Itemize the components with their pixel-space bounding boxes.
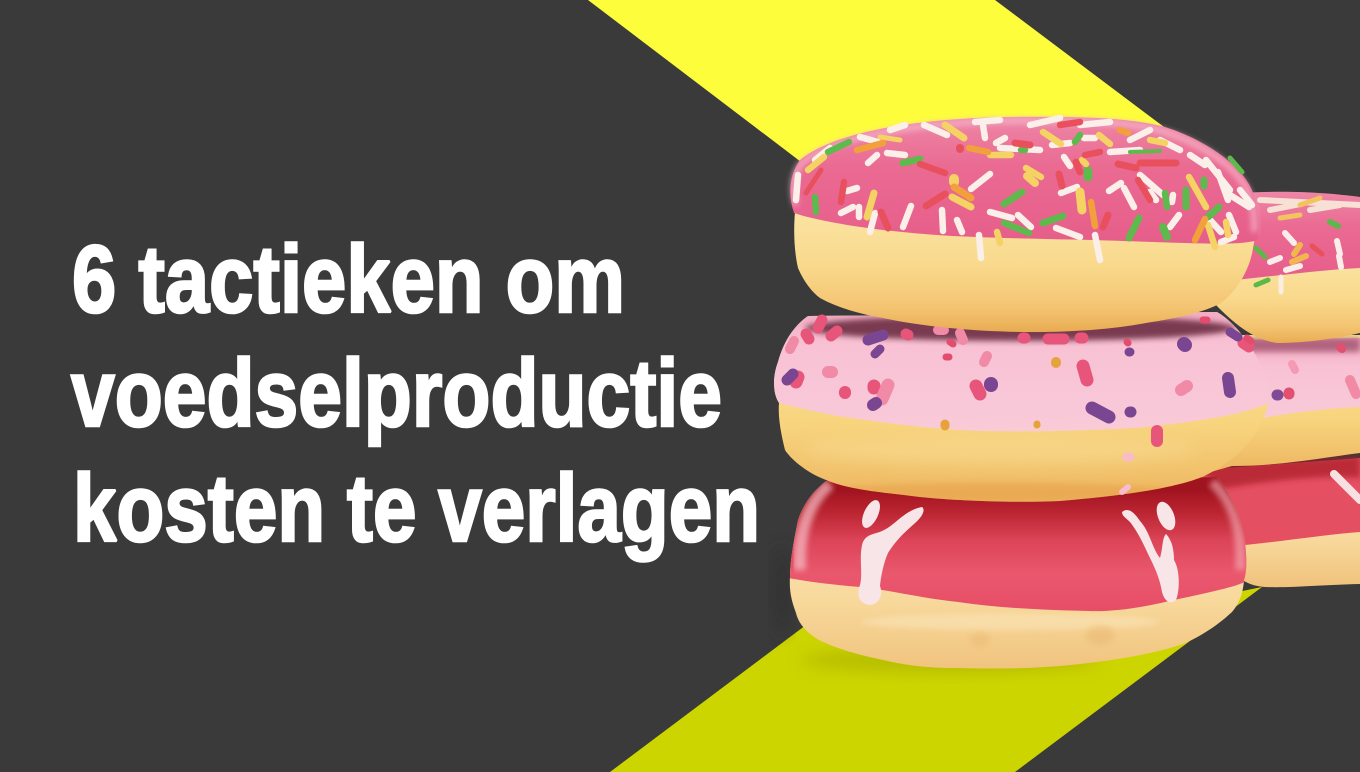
back top donut (1200, 192, 1360, 343)
donut shadow on background (772, 545, 792, 635)
front middle donut: light pink icing with crumbs (770, 300, 1275, 505)
white drizzle right (1122, 499, 1179, 602)
dough (794, 212, 1255, 332)
title (71, 226, 760, 562)
yellow chevron: upper band (588, 0, 1172, 200)
crumbs (787, 320, 1251, 492)
back donut stack (1200, 192, 1360, 587)
title: 6 tactieken om (72, 226, 625, 333)
white drizzle left (858, 497, 924, 605)
back middle donut (1200, 335, 1360, 475)
sprinkles (796, 118, 1252, 260)
title: voedselproductie (71, 340, 722, 447)
yellow chevron: lower band (610, 587, 1262, 772)
front bottom donut: red icing with white drizzle (785, 470, 1255, 675)
front top donut: pink icing with sprinkles (790, 117, 1259, 332)
back bottom donut (1200, 456, 1360, 587)
icing (790, 117, 1259, 244)
title: kosten te verlagen (73, 455, 760, 562)
